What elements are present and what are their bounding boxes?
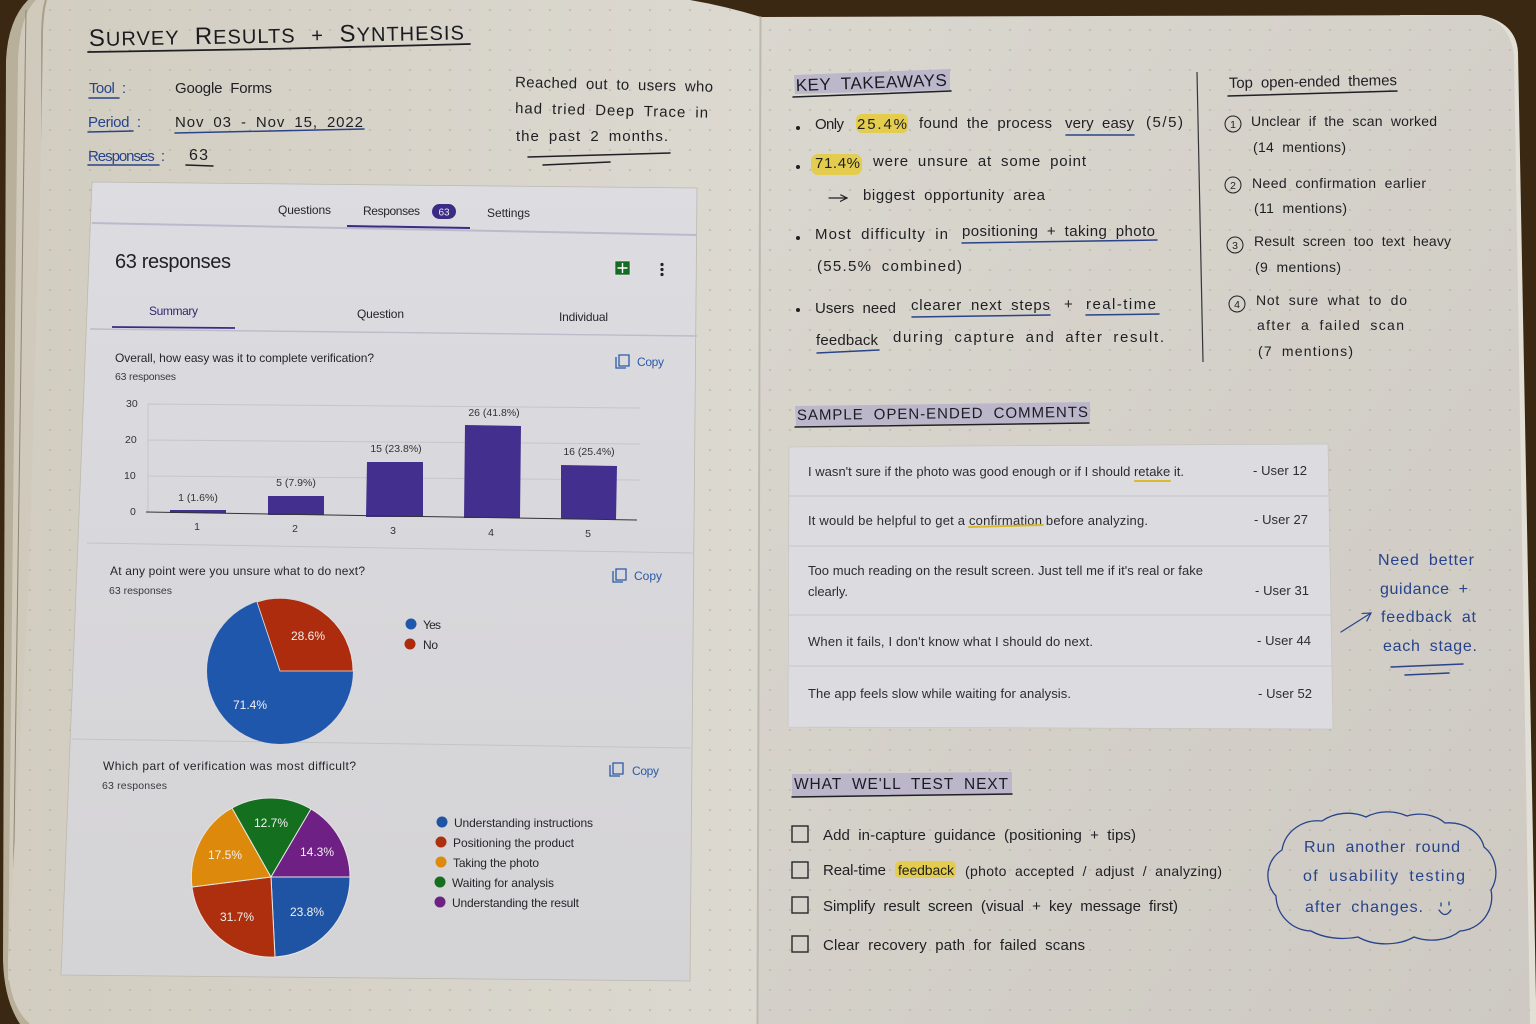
comment: user 31: - User 31: [1255, 583, 1309, 598]
side note: better guidance: each stage.: [1383, 638, 1477, 655]
comment: user 44: When it fails, I don't know what I should do next.: [808, 634, 1093, 649]
takeaway 4: real-time: [1086, 296, 1156, 313]
section: key takeaways: [793, 69, 1183, 353]
pie chart: most difficult part: 31.7%: [220, 910, 254, 924]
pie chart: most difficult part: 23.8%: [290, 905, 324, 919]
panel: google forms printout: [61, 182, 697, 981]
question 3 heading: [102, 759, 356, 792]
copy button 1: Copy: [637, 355, 664, 369]
outreach note: the past 2 months.: [516, 128, 668, 145]
comment: user 12: - User 12: [1253, 463, 1307, 478]
question 2 heading: [109, 564, 365, 597]
survey meta: tool, period, responses: Responses :: [88, 148, 165, 165]
bar chart: ease of verification: 5: [585, 528, 591, 540]
theme 2: (11 mentions): [1254, 200, 1347, 216]
comment: user 12: [808, 463, 1307, 481]
comment: user 31: Too much reading on the result screen. Just tell me if it's real or fake: [808, 563, 1203, 578]
survey meta: tool, period, responses: Tool :: [89, 80, 126, 97]
heading: themes: Top open-ended themes: [1229, 72, 1397, 92]
pie chart: unsure what to do next: 28.6%: [291, 629, 325, 643]
legend: yes / no: [404, 618, 441, 652]
bar chart: ease of verification: 16 (25.4%): [563, 446, 615, 458]
comment: user 31: clearly.: [808, 584, 848, 599]
theme 1: [1225, 113, 1437, 155]
takeaway 4: [796, 296, 1164, 353]
pie chart: most difficult part: [191, 798, 350, 957]
top tabs: Questions: [278, 203, 331, 217]
theme 2: [1225, 175, 1426, 216]
pie chart: unsure what to do next: [207, 598, 353, 744]
copy button 1: [616, 355, 664, 369]
takeaway 2: were unsure at some point: [872, 153, 1087, 170]
top tabs: Settings: [487, 206, 530, 220]
checklist item 3: Simplify result screen (visual + key message first): [823, 898, 1178, 915]
bar chart: ease of verification: 1 (1.6%): [178, 492, 218, 504]
heading: what we'll test next: [792, 772, 1012, 797]
right page stack edge: [1400, 15, 1536, 1024]
bar chart: ease of verification: 10: [124, 470, 136, 482]
takeaway 3: [796, 223, 1157, 275]
theme 3: (9 mentions): [1255, 259, 1341, 275]
side note: better guidance: Need better: [1378, 552, 1475, 569]
heading: survey results + synthesis: SURVEY RESULTS + SYNTHESIS: [89, 18, 464, 52]
bar chart: ease of verification: 2: [292, 523, 298, 535]
theme 3: 3: [1232, 240, 1238, 252]
arrow: note to table: [1341, 613, 1371, 632]
theme 3: [1227, 233, 1451, 275]
side note: better guidance: [1341, 552, 1477, 675]
heading: what we'll test next: WHAT WE'LL TEST NEXT: [794, 776, 1009, 793]
summary card header: 63 responses: [115, 251, 231, 273]
pie chart: unsure what to do next: 71.4%: [233, 698, 267, 712]
bar chart: ease of verification: 20: [125, 434, 137, 446]
left page stack edges: [3, 0, 60, 1024]
bar chart: ease of verification: 26 (41.8%): [468, 407, 520, 419]
bar chart: ease of verification: 0: [130, 506, 136, 518]
summary card header: [90, 251, 697, 336]
question 2 heading: 63 responses: [109, 585, 172, 597]
theme 4: Not sure what to do: [1256, 292, 1407, 308]
checklist item 1: Add in-capture guidance (positioning + tips): [823, 827, 1136, 844]
takeaway 2: biggest opportunity area: [863, 187, 1046, 204]
comment: user 52: - User 52: [1258, 686, 1312, 701]
takeaway 4: +: [1064, 296, 1073, 313]
takeaway 1: found the process: [919, 115, 1052, 132]
theme 1: 1: [1230, 119, 1236, 131]
callout: cloud note: Run another round: [1304, 839, 1460, 856]
takeaway 1: [796, 114, 1183, 135]
takeaway 4: feedback: [816, 332, 878, 349]
comment: user 27: - User 27: [1254, 512, 1308, 527]
top tabs: Responses: [363, 204, 420, 218]
side note: better guidance: feedback at: [1381, 609, 1477, 626]
summary card header: Summary: [149, 304, 198, 318]
outreach note: had tried Deep Trace in: [515, 100, 708, 122]
outreach note: Reached out to users who: [515, 74, 713, 96]
takeaway 4: clearer next steps: [911, 297, 1050, 314]
takeaway 3: (55.5% combined): [817, 258, 962, 275]
takeaway 1: 25.4%: [857, 116, 907, 133]
heading: key takeaways: KEY TAKEAWAYS: [795, 71, 947, 95]
bar chart: ease of verification: 30: [126, 398, 138, 410]
heading: sample open-ended comments: SAMPLE OPEN-ENDED COMMENTS: [797, 404, 1088, 424]
bar chart: ease of verification: 1: [194, 521, 200, 533]
legend: difficulty categories: [434, 816, 593, 910]
copy button 3: Copy: [632, 764, 659, 778]
comment: user 27: It would be helpful to get a confirmation before analyzing.: [808, 513, 1148, 528]
comment: user 27: [808, 512, 1308, 528]
section: what we'll test next: [792, 772, 1222, 954]
bar chart: ease of verification: 4: [488, 527, 494, 539]
panel: top open-ended themes: [1225, 72, 1451, 359]
takeaway 3: positioning + taking photo: [962, 223, 1155, 240]
theme 2: Need confirmation earlier: [1252, 175, 1426, 191]
icon: smiley: [1439, 902, 1451, 914]
comment: user 31: [808, 563, 1309, 599]
comment: user 44: - User 44: [1257, 633, 1311, 648]
survey meta: tool, period, responses: Nov 03 - Nov 15, 2022: [175, 114, 363, 131]
legend: yes / no: Yes: [423, 618, 441, 632]
callout: cloud note: of usability testing: [1303, 868, 1465, 885]
comment: user 52: The app feels slow while waiting for analysis.: [808, 686, 1071, 701]
bar chart: ease of verification: 3: [390, 525, 396, 537]
theme 3: Result screen too text heavy: [1254, 233, 1451, 249]
copy button 2: [613, 569, 662, 583]
question 1 heading: [115, 351, 374, 383]
takeaway 1: Only: [815, 116, 844, 133]
survey meta: tool, period, responses: [88, 80, 364, 166]
comment: user 44: [808, 633, 1311, 649]
panel: sample comments table: [788, 444, 1333, 729]
survey meta: tool, period, responses: 63: [189, 147, 208, 164]
right page: [757, 15, 1530, 1024]
theme 4: 4: [1234, 299, 1240, 311]
icon: more menu: [660, 263, 664, 276]
legend: yes / no: No: [423, 638, 438, 652]
checklist item 2: [792, 861, 1222, 879]
theme 4: after a failed scan: [1257, 317, 1404, 333]
pie chart: most difficult part: 12.7%: [254, 816, 288, 830]
theme 4: (7 mentions): [1258, 343, 1353, 359]
question 1 heading: 63 responses: [115, 371, 176, 383]
legend: difficulty categories: Taking the photo: [453, 856, 539, 870]
question 1 heading: Overall, how easy was it to complete verification?: [115, 351, 374, 365]
takeaway 2: [796, 153, 1087, 204]
survey meta: tool, period, responses: Google Forms: [175, 80, 272, 97]
theme 4: [1229, 292, 1407, 359]
left page: [8, 0, 761, 1024]
spine shadow: [757, 17, 761, 1024]
question 3 heading: 63 responses: [102, 780, 167, 792]
pie chart: most difficult part: 14.3%: [300, 845, 334, 859]
legend: difficulty categories: Positioning the product: [453, 836, 575, 850]
takeaway 4: Users need: [815, 300, 896, 317]
legend: difficulty categories: Waiting for analysis: [452, 876, 554, 890]
legend: difficulty categories: Understanding the result: [452, 896, 580, 910]
survey meta: tool, period, responses: Period :: [88, 114, 141, 131]
takeaway 2: 71.4%: [815, 155, 860, 172]
question 2 heading: At any point were you unsure what to do next?: [110, 564, 365, 578]
takeaway 1: (5/5): [1146, 114, 1183, 131]
takeaway 1: very easy: [1065, 115, 1134, 132]
checklist item 2: (photo accepted / adjust / analyzing): [965, 863, 1222, 879]
checklist item 4: Clear recovery path for failed scans: [823, 937, 1085, 954]
checklist item 2: Real-time: [823, 862, 886, 879]
legend: difficulty categories: Understanding instructions: [454, 816, 593, 830]
pie chart: most difficult part: 17.5%: [208, 848, 242, 862]
top tabs: [92, 203, 697, 235]
checklist item 2: feedback: [898, 862, 955, 878]
takeaway 4: during capture and after result.: [893, 329, 1164, 346]
theme 2: 2: [1230, 180, 1236, 192]
bar chart: ease of verification: 5 (7.9%): [276, 477, 316, 489]
icon: sheets export: [615, 261, 630, 275]
question 3 heading: Which part of verification was most difficult?: [103, 759, 356, 773]
summary card header: Question: [357, 307, 404, 321]
summary card header: Individual: [559, 310, 608, 324]
side note: better guidance: guidance +: [1380, 581, 1468, 598]
bar chart: ease of verification: [124, 398, 640, 540]
comment: user 12: I wasn't sure if the photo was good enough or if I should retake it.: [808, 464, 1184, 479]
comment: user 52: [808, 686, 1312, 701]
callout: cloud note: [1268, 812, 1496, 944]
takeaway 3: Most difficulty in: [815, 226, 948, 243]
theme 1: (14 mentions): [1253, 139, 1346, 155]
callout: cloud note: after changes.: [1305, 899, 1423, 916]
outreach note: [515, 74, 713, 165]
top tabs: 63: [438, 208, 450, 218]
copy button 3: [610, 763, 659, 778]
bar chart: ease of verification: 15 (23.8%): [370, 443, 422, 455]
theme 1: Unclear if the scan worked: [1251, 113, 1437, 129]
copy button 2: Copy: [634, 569, 662, 583]
